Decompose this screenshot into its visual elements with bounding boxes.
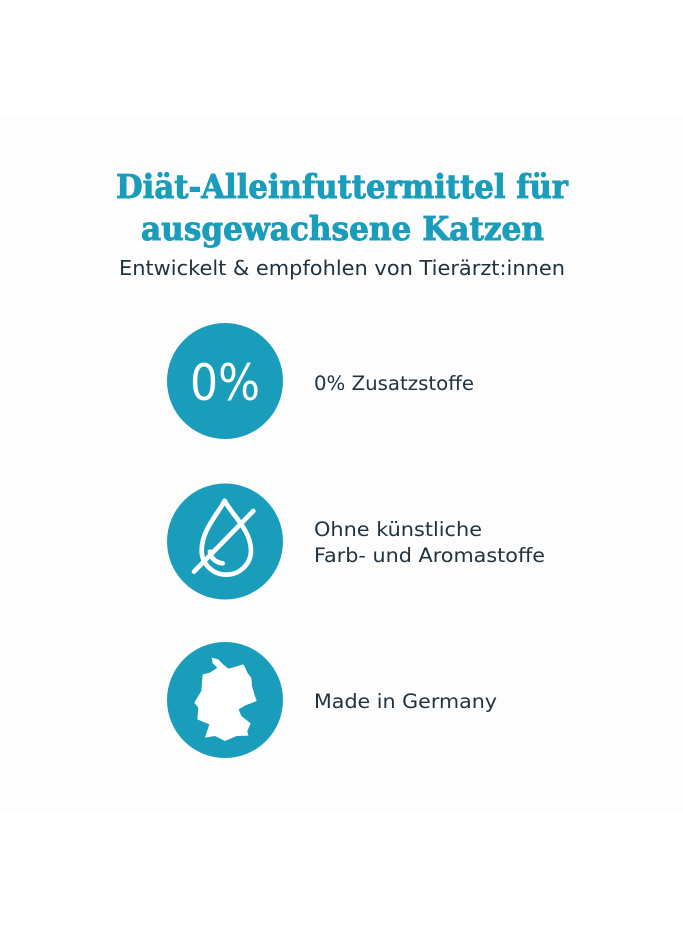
text: made in Germany: Made in Germany	[314, 690, 497, 713]
text: no additives: 0% Zusatzstoffe	[314, 372, 474, 395]
icon: 0 percent badge: 0%	[190, 354, 260, 412]
icon: Germany map badge	[167, 642, 283, 758]
icon: 0 percent badge	[167, 323, 283, 439]
text: no artificial colours and flavours: Farb- und Aromastoffe	[314, 544, 545, 567]
text: no artificial colours and flavours	[314, 518, 545, 567]
subtitle: Entwickelt & empfohlen von Tierärzt:innen	[119, 256, 565, 280]
text: no artificial colours and flavours: Ohne künstliche	[314, 518, 482, 541]
title: ausgewachsene Katzen	[141, 209, 544, 248]
title	[116, 167, 569, 248]
icon: crossed-out drop badge	[167, 484, 283, 600]
title: Diät-Alleinfuttermittel für	[116, 167, 569, 206]
